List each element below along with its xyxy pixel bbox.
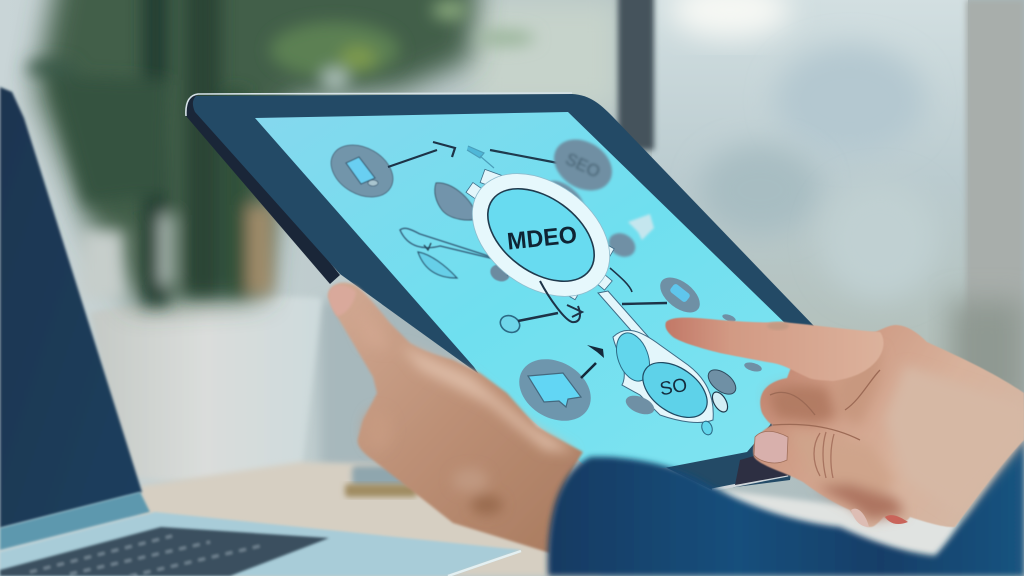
tablet xyxy=(185,93,814,490)
SEO badge: SEO xyxy=(563,149,603,182)
connector to small gear xyxy=(598,291,660,352)
index knuckle xyxy=(767,322,789,330)
right hand xyxy=(665,318,1024,527)
small teal marker xyxy=(467,146,494,168)
desk xyxy=(140,462,960,576)
right hand palm and wrist xyxy=(753,325,1024,527)
left hand highlights xyxy=(340,292,575,515)
right hand shading xyxy=(768,350,1024,520)
sleeve xyxy=(548,438,1024,576)
funnel sketch xyxy=(400,228,512,284)
lower finger nails xyxy=(851,509,869,527)
left hand xyxy=(328,283,583,553)
plant pot xyxy=(90,297,322,481)
gear label: MDEO xyxy=(506,221,578,256)
tablet body xyxy=(193,94,814,490)
small gear xyxy=(610,313,763,436)
chat bubble badge xyxy=(508,347,602,433)
arrow: up to small gear xyxy=(581,345,604,378)
thumb nail xyxy=(754,431,788,463)
whale-shaped bubble xyxy=(435,183,478,220)
finger creases xyxy=(770,370,880,440)
potted plant xyxy=(26,0,535,481)
arrow: top left xyxy=(388,142,455,167)
tablet screen xyxy=(255,112,795,470)
window xyxy=(618,0,1024,420)
thumb knuckle creases xyxy=(814,432,834,478)
plant foliage xyxy=(26,0,535,305)
left thumbnail xyxy=(329,285,356,316)
video gear xyxy=(449,148,633,322)
laptop keyboard xyxy=(0,527,329,576)
left hand shape xyxy=(328,283,583,553)
laptop base xyxy=(0,512,522,576)
laptop screen xyxy=(0,87,142,528)
SEO badge xyxy=(545,129,621,201)
laptop hinge xyxy=(0,492,150,550)
tablet side edge xyxy=(185,95,340,284)
index finger xyxy=(665,318,884,381)
laptop xyxy=(0,87,522,576)
small gear scribble: SO xyxy=(658,375,689,400)
diagram: phone icon xyxy=(322,135,402,207)
connector loop and right badge xyxy=(498,268,706,335)
small grey badges xyxy=(541,175,654,262)
arrow: top right xyxy=(490,150,558,163)
